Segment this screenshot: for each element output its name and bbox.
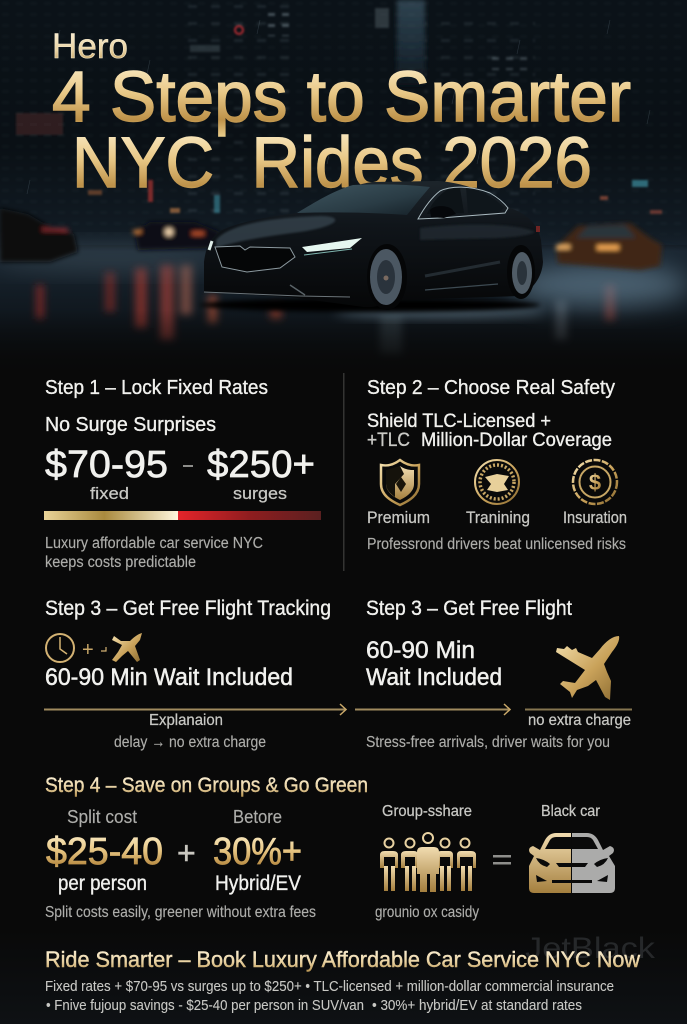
step 4 heading: Step 4 – Save on Groups & Go Green [45, 774, 368, 797]
icon: insurance seal: $ [589, 470, 601, 495]
hybrid label: Hybrid/EV [215, 872, 301, 895]
price separator [183, 465, 193, 467]
plus sign: + [82, 639, 94, 661]
wait included right: Wait Included [366, 664, 502, 691]
arrow 2 [355, 704, 510, 715]
surge price: $250+ [207, 444, 315, 486]
title line 2: NYC Rides 2026 [72, 124, 592, 203]
panel: step 2 real safety [367, 377, 627, 553]
icon labels: Premium [367, 509, 430, 527]
surges label: surges [233, 484, 287, 503]
watermark: JetBlack [525, 932, 656, 965]
step 1 heading: Step 1 – Lock Fixed Rates [45, 377, 268, 399]
panel: step 1 fixed rates [44, 377, 321, 571]
icon: large plane [556, 636, 619, 700]
stress-free note: Stress-free arrivals, driver waits for you [366, 734, 610, 751]
windshield [297, 184, 430, 215]
footer line 1: Fixed rates + $70-95 vs surges up to $250+ • TLC-licensed + million-dollar commercial insurance [45, 978, 614, 995]
step 2 note: Professrond drivers beat unlicensed risks [367, 536, 626, 553]
before label: Betore [233, 807, 282, 827]
equals sign [493, 855, 511, 864]
mirror [430, 206, 456, 218]
hybrid percent: 30%+ [213, 831, 302, 873]
step 3 heading left: Step 3 – Get Free Flight Tracking [45, 597, 331, 620]
icon labels: Tranining [466, 509, 530, 527]
arrow 1 [44, 704, 346, 715]
plus: + [177, 835, 196, 871]
no extra charge label: no extra charge [528, 712, 631, 729]
icon: small plane [112, 633, 142, 662]
background cars [0, 208, 662, 270]
line 3 [525, 708, 632, 710]
step 1 subheading: No Surge Surprises [45, 414, 216, 436]
dash mark [101, 647, 106, 651]
icon: shield [381, 460, 419, 505]
icon: training badge [475, 460, 519, 504]
footer line 2 end: • 30%+ hybrid/EV at standard rates [372, 997, 582, 1014]
spray and haze [510, 263, 687, 307]
rear wheel [507, 245, 535, 299]
step 2 subheading second line: +TLC [367, 430, 410, 451]
fade to black [0, 310, 687, 372]
black car label: Black car [541, 803, 601, 820]
group share label: Group-sshare [382, 803, 472, 820]
split cost label: Split cost [67, 807, 137, 827]
main black car [200, 181, 543, 312]
door line highlights [425, 262, 500, 276]
step 2 subheading: Shield TLC-Licensed + [367, 411, 551, 432]
icon: insurance seal [573, 460, 617, 504]
fixed price: $70-95 [45, 444, 168, 486]
title block [52, 27, 631, 203]
rain streaks [27, 20, 650, 194]
explanation label: Explanaion [149, 712, 223, 729]
group caption: grounio ox casidy [375, 904, 479, 921]
footer heading: Ride Smarter – Book Luxury Affordable Car Service NYC Now [45, 947, 640, 972]
panel: footer call to action [0, 930, 687, 1024]
panel: step 3 flight tracking [44, 597, 632, 751]
wait included text: 60-90 Min Wait Included [45, 664, 293, 691]
hero photo: rainy city street [0, 0, 687, 372]
headlight [302, 238, 362, 252]
icon: group of people [380, 833, 476, 892]
wait included right: 60-90 Min [366, 637, 475, 664]
step 1 note: Luxury affordable car service NYC [45, 535, 263, 552]
fixed label: fixed [90, 484, 129, 503]
front wheel [367, 244, 407, 310]
lower bumper lines [204, 292, 350, 297]
title line 1: 4 Steps to Smarter [52, 58, 631, 137]
step 1 note: keeps costs predictable [45, 554, 196, 571]
road reflections [36, 265, 615, 355]
side windows [427, 188, 464, 214]
grille [215, 246, 295, 272]
icon labels: Insuration [563, 509, 627, 527]
flank shine [420, 225, 535, 240]
comparison bar [44, 511, 321, 520]
window chrome [418, 187, 508, 219]
delay note: delay → no extra charge [114, 734, 266, 751]
step 3 heading right: Step 3 – Get Free Flight [366, 597, 572, 620]
icon: half gold half silver car [529, 833, 615, 893]
step 4 note: Split costs easily, greener without extra fees [45, 904, 316, 921]
footer line 2: • Fnive fujoup savings - $25-40 per person in SUV/van [46, 997, 364, 1014]
split price: $25-40 [46, 831, 163, 873]
per person label: per person [58, 872, 147, 895]
step 2 heading: Step 2 – Choose Real Safety [367, 377, 615, 399]
panel: step 4 groups and green [45, 774, 615, 921]
hood highlight [216, 216, 335, 248]
road surface [0, 225, 687, 370]
step 2 subheading second line: Million-Dollar Coverage [421, 430, 612, 451]
hero label: Hero [52, 27, 128, 66]
icon: clock [46, 634, 74, 662]
